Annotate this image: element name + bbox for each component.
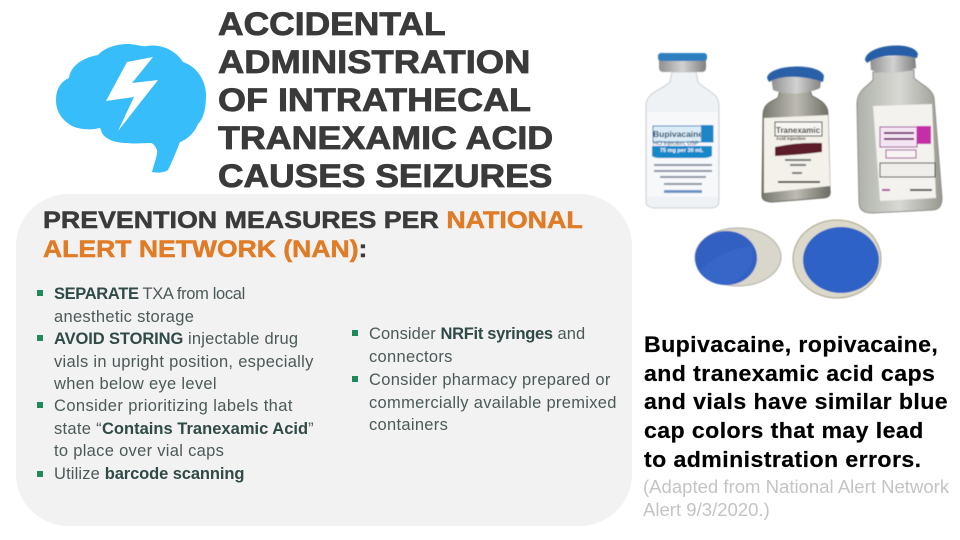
photo: three vials and two blue caps (645, 44, 944, 300)
left bullet list: AVOID STORING injectable drug (54, 330, 298, 348)
title: TRANEXAMIC ACID (218, 120, 553, 156)
right bullet list (352, 325, 617, 434)
heading: prevention measures: ALERT NETWORK (NAN): (43, 236, 367, 263)
left bullet list: vials in upright position, especially (54, 352, 314, 370)
right bullet list: containers (369, 416, 448, 434)
left bullet list: Utilize barcode scanning (54, 465, 244, 483)
icon: brain with lightning bolt (56, 44, 206, 173)
vial: bupivacaine: 75 mg per 30 mL (660, 148, 704, 154)
panel: prevention measures (16, 194, 632, 526)
title: ACCIDENTAL (218, 6, 446, 42)
left bullet list: SEPARATE TXA from local (54, 285, 245, 303)
source note: Alert 9/3/2020.) (643, 499, 770, 520)
vial: tranexamic acid: Tranexamic (776, 126, 821, 135)
left bullet list: when below eye level (54, 375, 217, 393)
title: OF INTRATHECAL (218, 82, 531, 118)
title (218, 6, 553, 194)
left bullet list: state “Contains Tranexamic Acid” (54, 420, 314, 438)
source note (643, 476, 949, 520)
right bullet list: connectors (369, 348, 453, 366)
cap: left blue cap (695, 228, 781, 286)
caption: similar blue caps: and vials have similar blue (644, 389, 948, 414)
left bullet list: to place over vial caps (54, 442, 224, 460)
right bullet list: Consider pharmacy prepared or (369, 371, 611, 389)
left bullet list (37, 285, 314, 483)
source note: (Adapted from National Alert Network (643, 476, 949, 497)
vial: bupivacaine (646, 53, 719, 208)
caption: similar blue caps: and tranexamic acid caps (644, 361, 935, 386)
caption: similar blue caps: to administration errors. (644, 447, 921, 472)
vial: bupivacaine: HCl Injection, USP (653, 141, 699, 147)
vial: tranexamic acid (762, 66, 830, 202)
title: CAUSES SEIZURES (218, 158, 552, 194)
caption: similar blue caps (644, 332, 948, 472)
cap: right blue cap (793, 220, 881, 298)
vial: tranexamic acid: Acid Injection (776, 136, 806, 141)
title: ADMINISTRATION (218, 44, 530, 80)
left bullet list: anesthetic storage (54, 308, 194, 326)
caption: similar blue caps: cap colors that may lead (644, 418, 924, 443)
vial: ropivacaine (857, 45, 942, 213)
right bullet list: Consider NRFit syringes and (369, 325, 585, 343)
right bullet list: commercially available premixed (369, 394, 617, 412)
caption: similar blue caps: Bupivacaine, ropivacaine, (644, 332, 938, 357)
vial: bupivacaine: Bupivacaine (653, 129, 703, 139)
left bullet list: Consider prioritizing labels that (54, 397, 293, 415)
heading: prevention measures (43, 207, 583, 263)
heading: prevention measures: PREVENTION MEASURES PER NATIONAL (43, 207, 583, 234)
